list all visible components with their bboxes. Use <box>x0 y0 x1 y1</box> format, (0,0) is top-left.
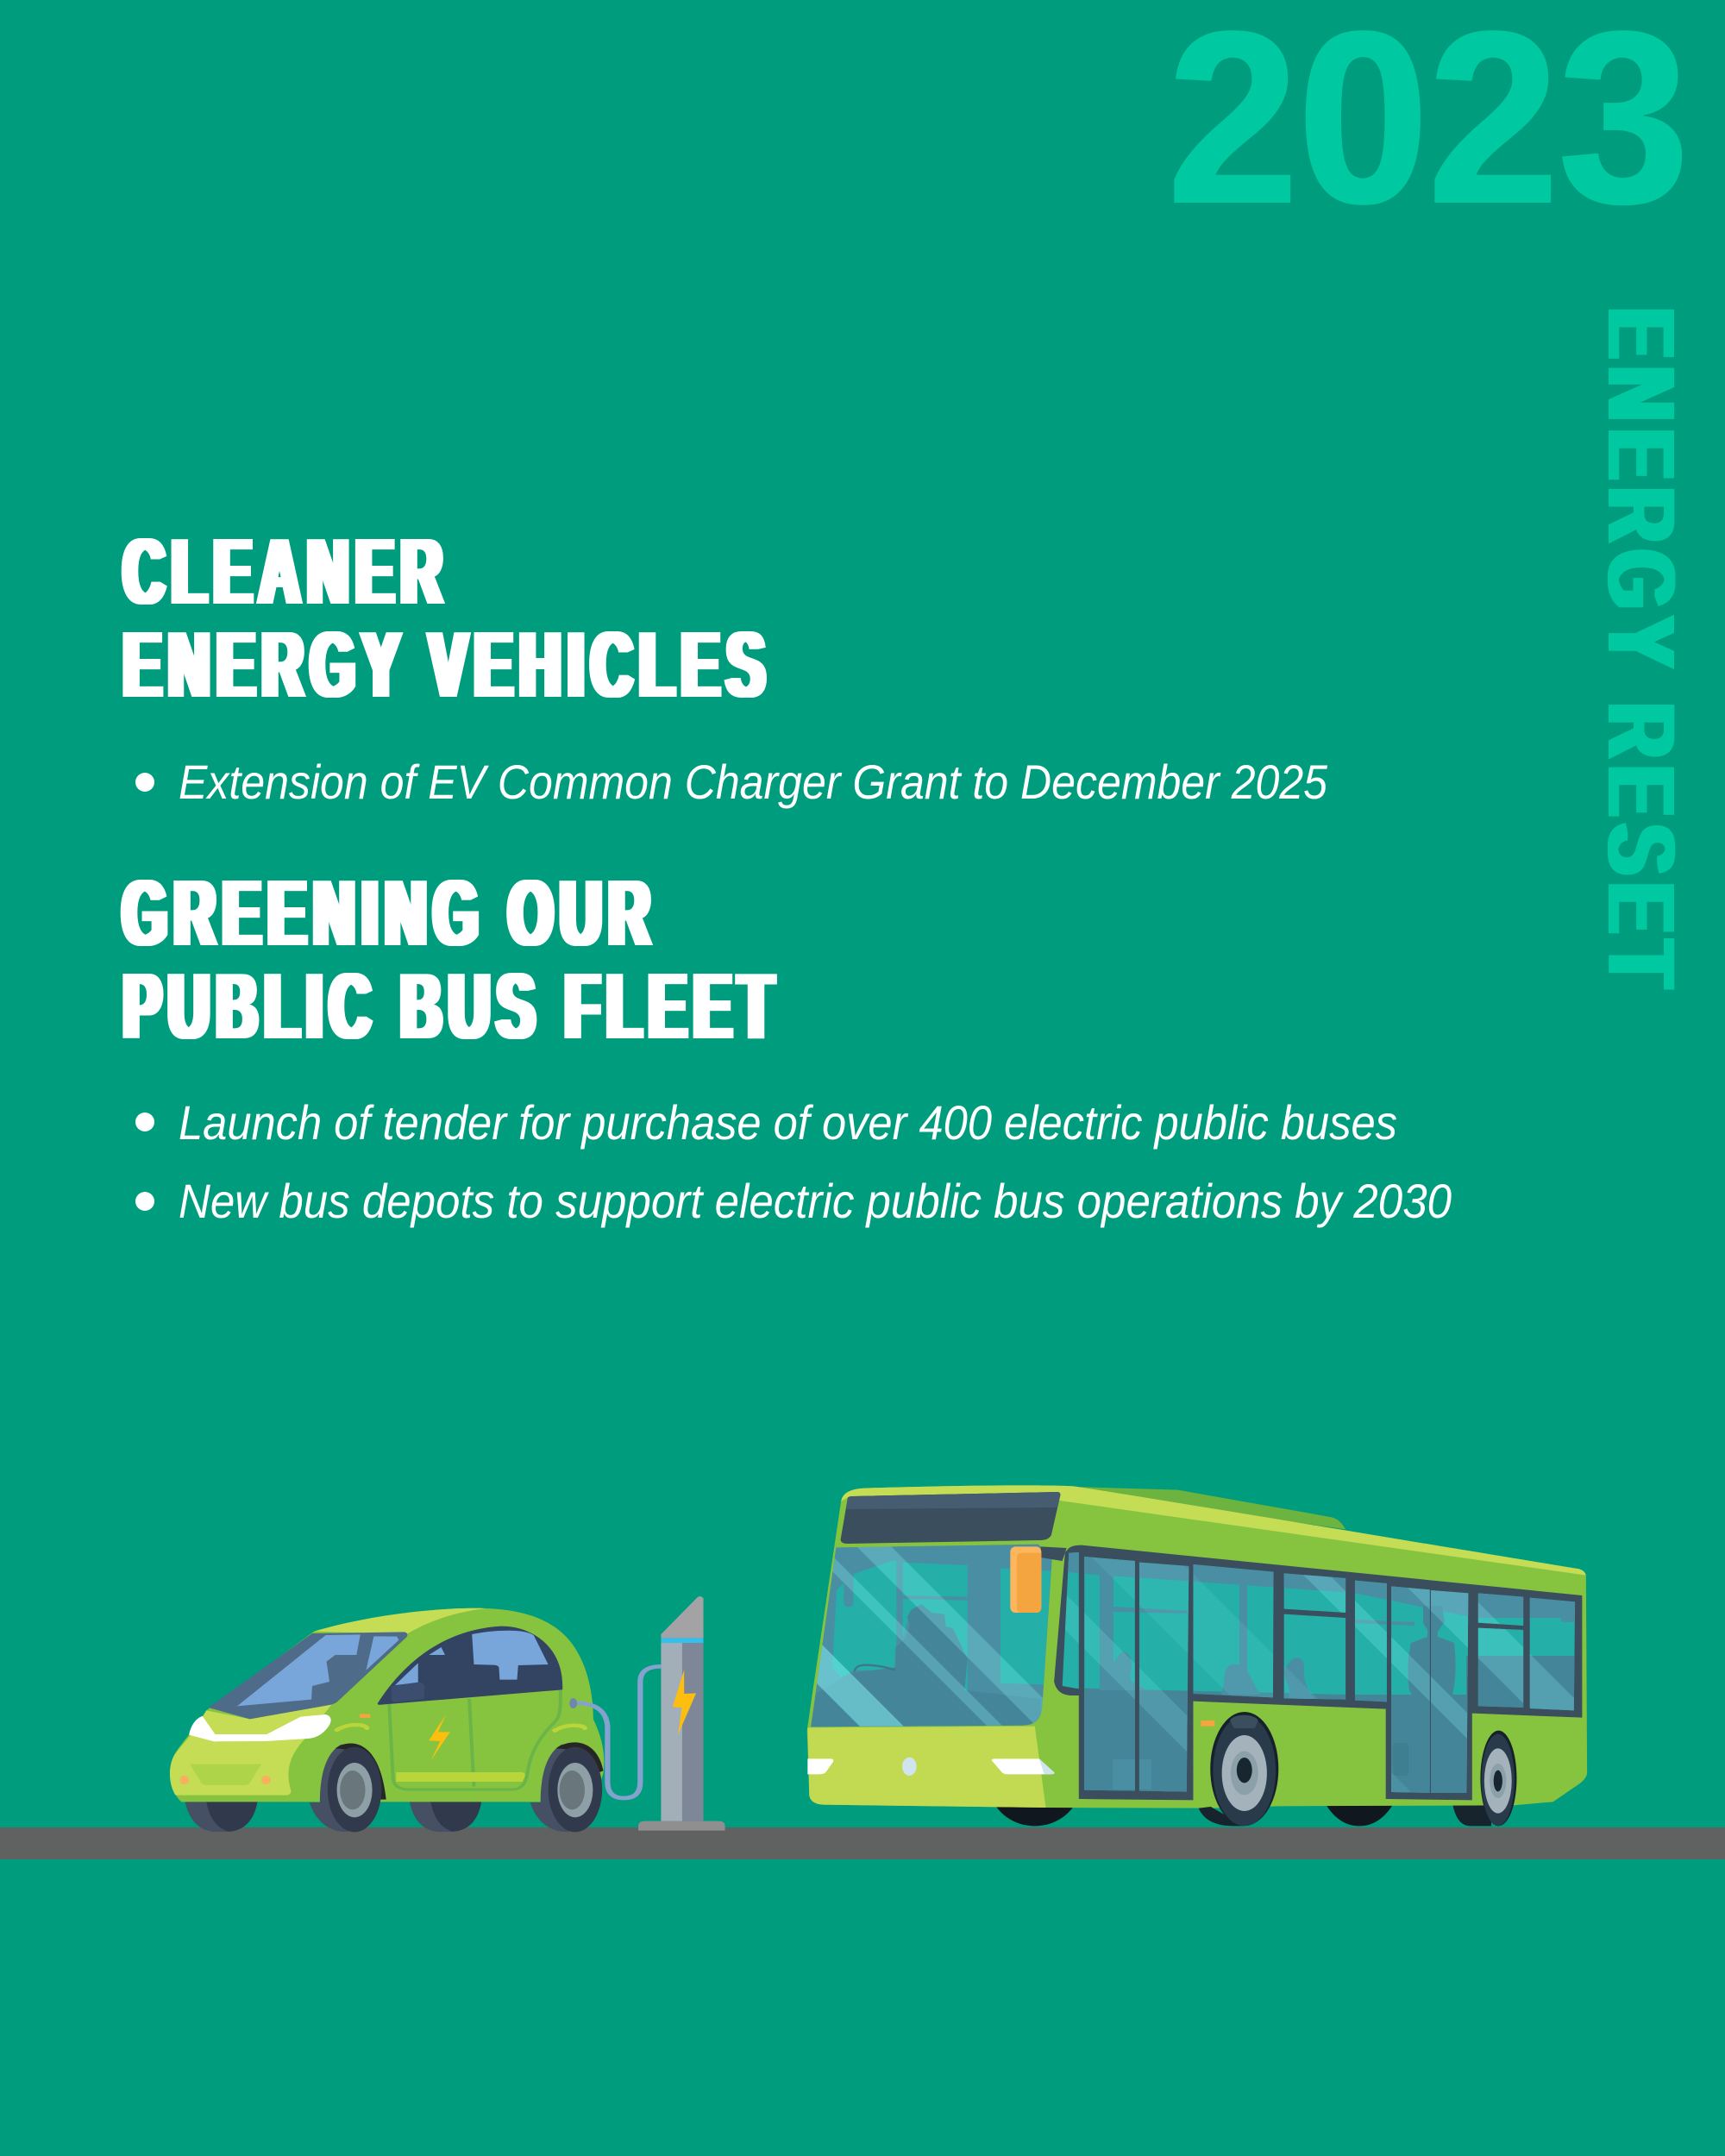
door strip <box>396 1772 525 1782</box>
front wheel <box>308 1743 386 1832</box>
illustration: electric bus <box>807 1485 1587 1827</box>
plug <box>569 1698 577 1708</box>
car body <box>171 1608 604 1802</box>
grille <box>190 1764 261 1785</box>
bullet list: greening our public bus fleet <box>135 1095 1452 1228</box>
body <box>807 1485 1587 1808</box>
far wheels <box>185 1801 481 1832</box>
front bumper <box>807 1727 1046 1808</box>
hood <box>170 1705 331 1796</box>
mirror <box>1010 1546 1041 1613</box>
bus front lights <box>807 1720 1214 1776</box>
rear wheel <box>528 1742 603 1832</box>
heading: greening our public bus fleet: PUBLIC BUS FLEET <box>123 954 781 1059</box>
heading: cleaner energy vehicles: CLEANER <box>123 519 449 624</box>
windshield <box>811 1544 1052 1727</box>
heading: cleaner energy vehicles: ENERGY VEHICLES <box>123 612 772 718</box>
roof highlight <box>314 1608 486 1634</box>
destination sign <box>841 1492 1060 1544</box>
windshield <box>208 1632 407 1719</box>
bus front wheel <box>1199 1712 1278 1826</box>
headlight <box>189 1714 331 1741</box>
roof stripe <box>841 1485 1586 1576</box>
road <box>0 1827 1725 1859</box>
illustration: electric car <box>170 1608 661 1832</box>
lamps <box>179 1714 370 1784</box>
side windows <box>378 1626 562 1705</box>
wheel arch trims <box>337 1725 585 1731</box>
vertical title: energy reset: ENERGY RESET <box>1588 308 1694 995</box>
side window frame <box>1054 1545 1582 1800</box>
heading: greening our public bus fleet: GREENING OUR <box>122 861 657 966</box>
door lines <box>389 1690 561 1789</box>
mirror arm <box>1041 1546 1067 1561</box>
bullet list: greening our public bus fleet: New bus depots to support electric public bus operations by 2030 <box>179 1174 1452 1228</box>
bullet list: greening our public bus fleet: Launch of tender for purchase of over 400 electric public buses <box>179 1095 1397 1150</box>
cable <box>574 1666 661 1798</box>
heading: greening our public bus fleet <box>122 861 781 1059</box>
side glass and passengers <box>1063 1552 1575 1793</box>
icon: charging station <box>638 1596 725 1831</box>
bus rear wheel <box>1480 1731 1516 1826</box>
heading: cleaner energy vehicles <box>123 519 772 718</box>
underside wheels <box>996 1805 1491 1826</box>
lightning bolt on door <box>429 1714 450 1761</box>
bullet list: cleaner energy vehicles: Extension of EV Common Charger Grant to December 2025 <box>179 755 1328 809</box>
roof unit <box>1073 1487 1346 1529</box>
